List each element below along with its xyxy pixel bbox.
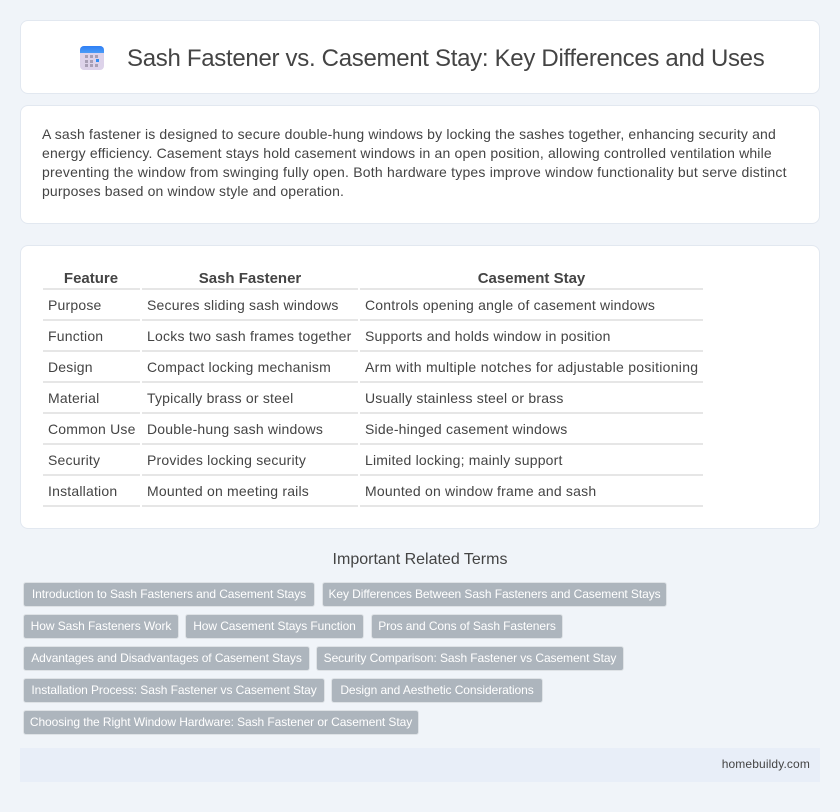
row: Purpose: Secures sliding sash windows: [147, 297, 339, 313]
row: Installation: [48, 483, 596, 499]
row: Material: Usually stainless steel or brass: [365, 390, 564, 406]
row: Purpose: Purpose: [48, 297, 102, 313]
table header: Casement Stay: [478, 270, 585, 287]
heading: related terms: Important Related Terms: [333, 551, 507, 568]
text block: intro paragraph: energy efficiency. Casement stays hold casement windows in an open position, allowing controlled ventilation while: [42, 145, 772, 161]
row: Design: Arm with multiple notches for adjustable positioning: [365, 359, 698, 375]
panel: introduction text: [20, 105, 820, 224]
row: Design: [48, 359, 698, 375]
panel: title header: [20, 20, 820, 94]
text block: intro paragraph: preventing the window from swinging fully open. Both hardware types improve window functionality but serve distinct: [42, 164, 787, 180]
text block: intro paragraph: A sash fastener is designed to secure double-hung windows by locking the sashes together, enhancing security and: [42, 126, 776, 142]
panel: related term tags: [23, 582, 667, 735]
panel: related term tags: Introduction to Sash Fasteners and Casement Stays: [32, 587, 306, 601]
icon: calendar: [80, 46, 104, 70]
row: Common Use: Double-hung sash windows: [147, 421, 323, 437]
row: Function: Locks two sash frames together: [147, 328, 352, 344]
row: Common Use: Common Use: [48, 421, 136, 437]
panel: related term tags: Installation Process: Sash Fastener vs Casement Stay: [31, 683, 317, 697]
panel: related term tags: Key Differences Between Sash Fasteners and Casement Stays: [328, 587, 661, 601]
row: Security: [48, 452, 563, 468]
panel: comparison table: [20, 245, 820, 529]
panel: related term tags: How Casement Stays Function: [193, 619, 356, 633]
row: Purpose: [48, 297, 655, 313]
row: Installation: Installation: [48, 483, 117, 499]
row: Installation: Mounted on window frame and sash: [365, 483, 596, 499]
row: Common Use: [48, 421, 568, 437]
row: Function: Function: [48, 328, 103, 344]
row: Purpose: Controls opening angle of casement windows: [365, 297, 655, 313]
row: Material: Material: [48, 390, 99, 406]
row: Function: [48, 328, 611, 344]
footer source link: homebuildy.com: [722, 757, 810, 771]
row: Design: Compact locking mechanism: [147, 359, 331, 375]
panel: related term tags: Choosing the Right Window Hardware: Sash Fastener or Casement Stay: [30, 715, 412, 729]
title: Sash Fastener vs. Casement Stay: Key Differences and Uses: [127, 45, 764, 72]
panel: related term tags: Advantages and Disadvantages of Casement Stays: [31, 651, 302, 665]
row: Common Use: Side-hinged casement windows: [365, 421, 568, 437]
row: Security: Provides locking security: [147, 452, 306, 468]
table header: Sash Fastener: [199, 270, 301, 287]
panel: related term tags: How Sash Fasteners Work: [31, 619, 171, 633]
row: Installation: Mounted on meeting rails: [147, 483, 309, 499]
panel: related term tags: Security Comparison: Sash Fastener vs Casement Stay: [324, 651, 616, 665]
row: Design: Design: [48, 359, 93, 375]
footer: [20, 748, 820, 782]
row: Function: Supports and holds window in position: [365, 328, 611, 344]
panel: related term tags: Pros and Cons of Sash Fasteners: [378, 619, 556, 633]
table header: [64, 270, 586, 287]
table header: Feature: [64, 270, 118, 287]
row: Security: Limited locking; mainly support: [365, 452, 563, 468]
row: Material: Typically brass or steel: [147, 390, 293, 406]
panel: related term tags: Design and Aesthetic Considerations: [340, 683, 534, 697]
text block: intro paragraph: purposes based on window style and operation.: [42, 183, 344, 199]
row: Security: Security: [48, 452, 100, 468]
text block: intro paragraph: [42, 126, 787, 199]
row: Material: [48, 390, 564, 406]
